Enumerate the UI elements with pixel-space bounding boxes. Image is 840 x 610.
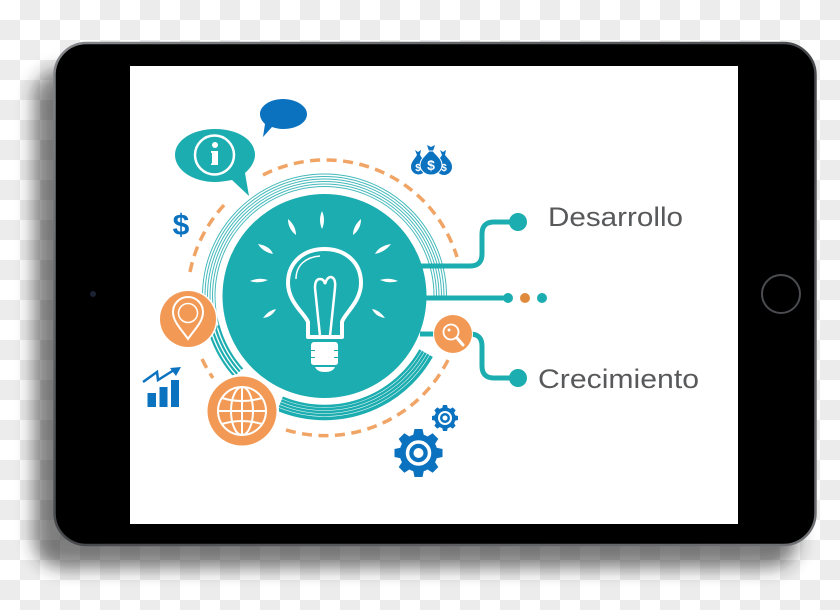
icon: magnifier circle [434, 315, 472, 353]
icon: money bags: $ [415, 163, 421, 174]
tablet body [54, 43, 816, 545]
icon: light bulb [288, 249, 361, 372]
icon: blue speech bubble [260, 99, 307, 137]
icon: dollar sign: $ [173, 209, 190, 242]
connector dots [503, 213, 547, 387]
connector lines [420, 222, 515, 378]
striped left arc [210, 324, 244, 376]
outer thin rings [202, 174, 447, 328]
home button [762, 275, 800, 313]
central circle halo [218, 190, 431, 402]
icon: money bags [411, 145, 452, 175]
icon: location pin circle [160, 291, 216, 347]
icon: growth bar chart [143, 367, 181, 407]
central teal circle [222, 194, 426, 398]
dashed orbit [190, 160, 457, 436]
icon: money bags: $ [441, 163, 447, 174]
icon: small gear [432, 405, 458, 431]
icon: large gear [394, 429, 442, 477]
label: Desarrollo: Desarrollo [548, 202, 683, 232]
device shadow [34, 70, 798, 568]
striped lower arc [278, 349, 433, 420]
screen [130, 66, 738, 524]
label: Crecimiento: Crecimiento [538, 364, 699, 394]
icon: info speech bubble [175, 129, 255, 196]
icon: globe circle [208, 376, 276, 446]
camera [90, 291, 96, 297]
icon: money bags: $ [427, 157, 435, 173]
icon: light rays [250, 211, 398, 318]
